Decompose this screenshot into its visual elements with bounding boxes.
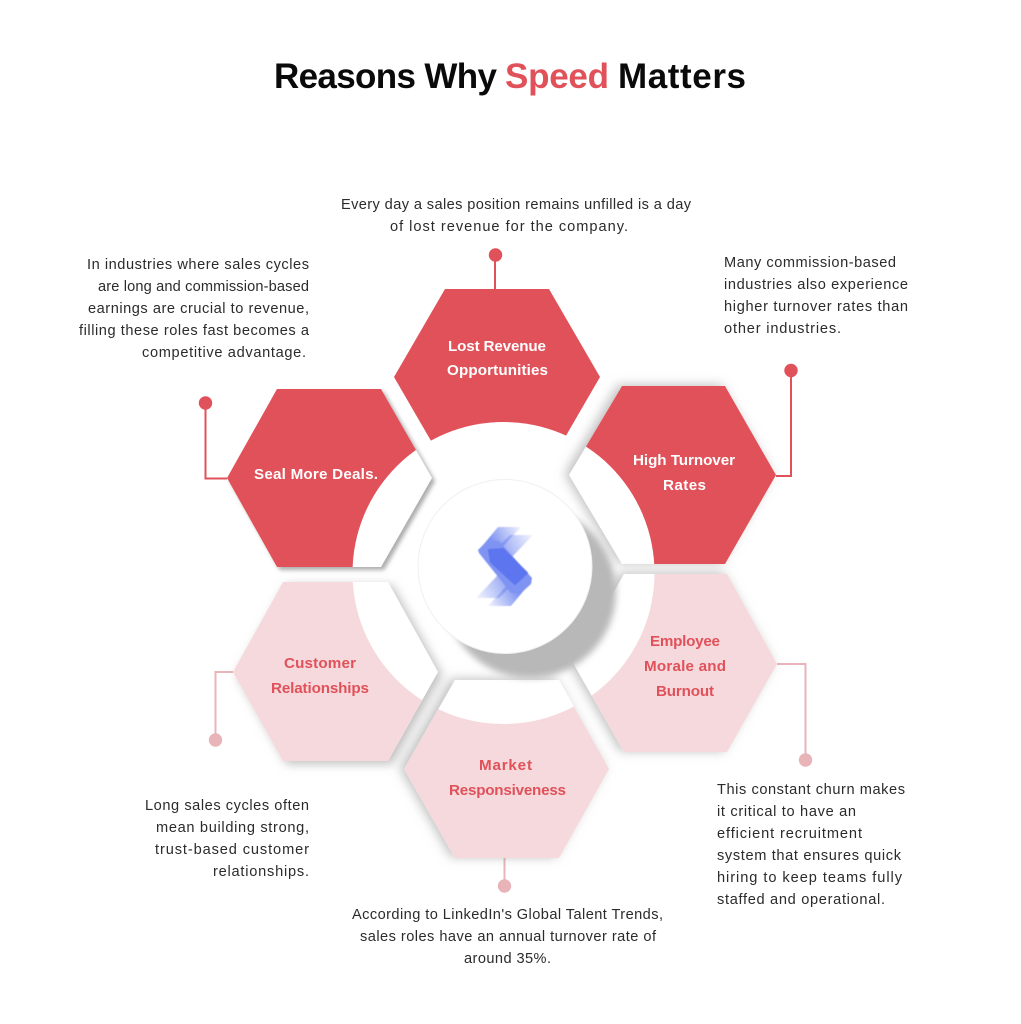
icon: blue S logo — [476, 527, 533, 606]
hexagon: employee morale — [573, 574, 777, 752]
text: market responsiveness description — [352, 907, 663, 967]
label: market responsiveness — [449, 757, 566, 799]
text: customer relationships description: Long sales cycles often — [145, 798, 309, 814]
text: seal more deals description — [79, 257, 310, 361]
hexagon: high turnover — [569, 386, 776, 564]
hexagon: lost revenue — [394, 289, 600, 441]
label: lost revenue opportunities: Opportunities — [447, 362, 548, 379]
hexagon: seal more deals — [227, 389, 432, 567]
text: high turnover description: other industries. — [724, 321, 841, 337]
text: employee morale description: efficient recruitment — [717, 826, 862, 842]
hexagon: market responsiveness — [404, 680, 609, 858]
text: seal more deals description: filling these roles fast becomes a — [79, 323, 310, 339]
label: high turnover rates: High Turnover — [633, 452, 735, 469]
connector: seal more deals — [199, 396, 227, 478]
title — [274, 57, 746, 96]
text: customer relationships description: mean building strong, — [156, 820, 309, 836]
label: market responsiveness: Responsiveness — [449, 782, 566, 799]
label: customer relationships — [271, 655, 369, 697]
label: market responsiveness: Market — [479, 757, 532, 774]
text: lost revenue description — [341, 197, 692, 235]
title: Reasons Why — [274, 57, 498, 96]
text: seal more deals description: competitive advantage. — [142, 345, 306, 361]
label: seal more deals: Seal More Deals. — [254, 466, 378, 483]
hexagon: customer relationships — [233, 582, 438, 761]
text: employee morale description — [717, 782, 905, 908]
center circle — [418, 480, 592, 654]
text: employee morale description: staffed and operational. — [717, 892, 885, 908]
text: employee morale description: system that ensures quick — [717, 848, 902, 864]
label: high turnover rates: Rates — [663, 477, 706, 494]
label: employee morale and burnout: Burnout — [656, 683, 714, 700]
label: employee morale and burnout: Employee — [650, 633, 720, 650]
title: Matters — [618, 57, 746, 96]
label: lost revenue opportunities: Lost Revenue — [448, 338, 546, 355]
text: high turnover description: Many commission-based — [724, 255, 896, 271]
text: employee morale description: hiring to keep teams fully — [717, 870, 903, 886]
center circle shadow — [444, 506, 616, 678]
connector: customer relationships — [209, 672, 233, 747]
text: seal more deals description: are long and commission-based — [98, 279, 309, 295]
text: customer relationships description — [145, 798, 309, 880]
connector: lost revenue — [489, 248, 502, 289]
label: customer relationships: Relationships — [271, 680, 369, 697]
text: lost revenue description: of lost revenue for the company. — [390, 219, 628, 235]
connector: market responsiveness — [498, 858, 511, 893]
text: market responsiveness description: around 35%. — [464, 951, 551, 967]
text: market responsiveness description: sales roles have an annual turnover rate of — [360, 929, 657, 945]
text: customer relationships description: relationships. — [213, 864, 309, 880]
text: employee morale description: This constant churn makes — [717, 782, 905, 798]
text: seal more deals description: earnings are crucial to revenue, — [88, 301, 309, 317]
text: high turnover description: higher turnover rates than — [724, 299, 908, 315]
text: customer relationships description: trust-based customer — [155, 842, 309, 858]
label: high turnover rates — [633, 452, 735, 494]
text: high turnover description: industries also experience — [724, 277, 908, 293]
label: employee morale and burnout — [644, 633, 726, 700]
connector: employee morale — [777, 664, 812, 767]
label: lost revenue opportunities — [447, 338, 548, 379]
connector: high turnover — [776, 364, 798, 476]
text: high turnover description — [724, 255, 908, 337]
text: lost revenue description: Every day a sales position remains unfilled is a day — [341, 197, 692, 213]
text: employee morale description: it critical to have an — [717, 804, 856, 820]
text: seal more deals description: In industries where sales cycles — [87, 257, 309, 273]
label: customer relationships: Customer — [284, 655, 356, 672]
text: market responsiveness description: According to LinkedIn's Global Talent Trends, — [352, 907, 663, 923]
label: employee morale and burnout: Morale and — [644, 658, 726, 675]
title: Speed — [505, 57, 609, 96]
